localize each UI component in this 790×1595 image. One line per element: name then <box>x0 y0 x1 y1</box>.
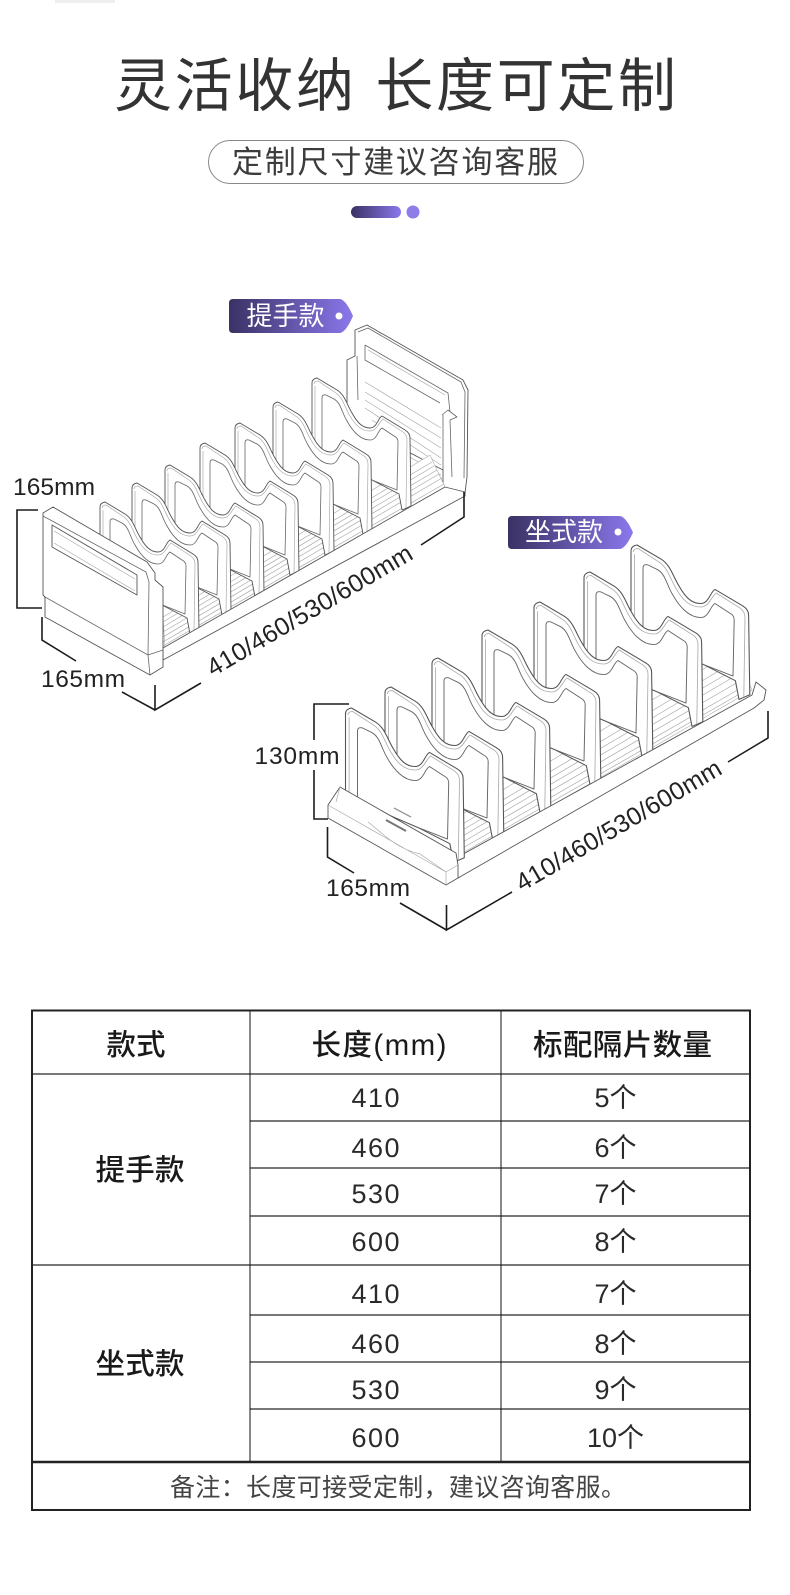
product diagram: handle rack <box>43 325 468 675</box>
dimension labels: handle rack: 165mm <box>41 666 125 693</box>
row group: handle type: 8个 <box>594 1227 636 1257</box>
row group: handle type: 600 <box>352 1227 400 1257</box>
dimension labels: handle rack: 410/460/530/600mm <box>202 539 418 682</box>
dimension labels: seated rack: 410/460/530/600mm <box>511 754 727 897</box>
table note: 备注：长度可接受定制，建议咨询客服。 <box>170 1474 626 1502</box>
table header: 款式 <box>106 1029 166 1062</box>
row group: seated type: 7个 <box>594 1279 636 1309</box>
row group: seated type: 8个 <box>594 1329 636 1359</box>
row group: handle type <box>96 1083 636 1257</box>
decorative bar and dot <box>351 206 420 218</box>
row group: handle type: 5个 <box>594 1083 636 1113</box>
base foot <box>328 787 458 885</box>
row group: seated type <box>96 1279 644 1453</box>
title: 灵活收纳 长度可定制 <box>114 54 676 119</box>
row group: seated type: 460 <box>352 1329 400 1359</box>
tag: seated type <box>508 516 633 549</box>
dimension labels: seated rack: 130mm <box>254 743 340 770</box>
table header: 长度(mm) <box>312 1029 446 1062</box>
tag: handle type <box>229 299 353 333</box>
spec table <box>32 1010 750 1510</box>
table grid <box>32 1010 750 1510</box>
subtitle pill: 定制尺寸建议咨询客服 <box>232 145 558 180</box>
product diagram: seated rack <box>328 545 766 885</box>
row group: handle type: 6个 <box>594 1133 636 1163</box>
dimension labels: seated rack: 165mm <box>326 875 410 902</box>
row group: handle type: 7个 <box>594 1179 636 1209</box>
table header <box>106 1029 712 1062</box>
dividers <box>385 545 750 841</box>
row group: seated type: 10个 <box>587 1423 644 1453</box>
row group: handle type: 提手款 <box>96 1154 184 1187</box>
side rail <box>456 682 766 878</box>
tag: seated type: 坐式款 <box>525 517 603 547</box>
top edge smudge <box>55 0 115 3</box>
table header: 标配隔片数量 <box>533 1029 712 1062</box>
dimension lines: seated rack <box>314 704 768 930</box>
row group: handle type: 530 <box>352 1179 400 1209</box>
dimension labels: handle rack: 165mm <box>13 474 95 501</box>
front handle panel <box>43 507 163 675</box>
row group: seated type: 9个 <box>594 1375 636 1405</box>
row group: seated type: 530 <box>352 1375 400 1405</box>
tag: handle type: 提手款 <box>246 301 324 331</box>
row group: handle type: 410 <box>352 1083 400 1113</box>
row group: seated type: 600 <box>352 1423 400 1453</box>
rack floor with slats <box>163 455 445 648</box>
side rail <box>163 487 465 660</box>
row group: handle type: 460 <box>352 1133 400 1163</box>
row group: seated type: 坐式款 <box>96 1348 184 1381</box>
dimension labels: handle rack <box>13 474 418 693</box>
back handle panel <box>347 325 468 502</box>
dimension lines: handle rack <box>17 492 464 710</box>
rack floor with slats <box>461 650 752 858</box>
dividers <box>100 378 411 634</box>
front divider <box>346 708 464 862</box>
row group: seated type: 410 <box>352 1279 400 1309</box>
dimension labels: seated rack <box>254 743 727 902</box>
